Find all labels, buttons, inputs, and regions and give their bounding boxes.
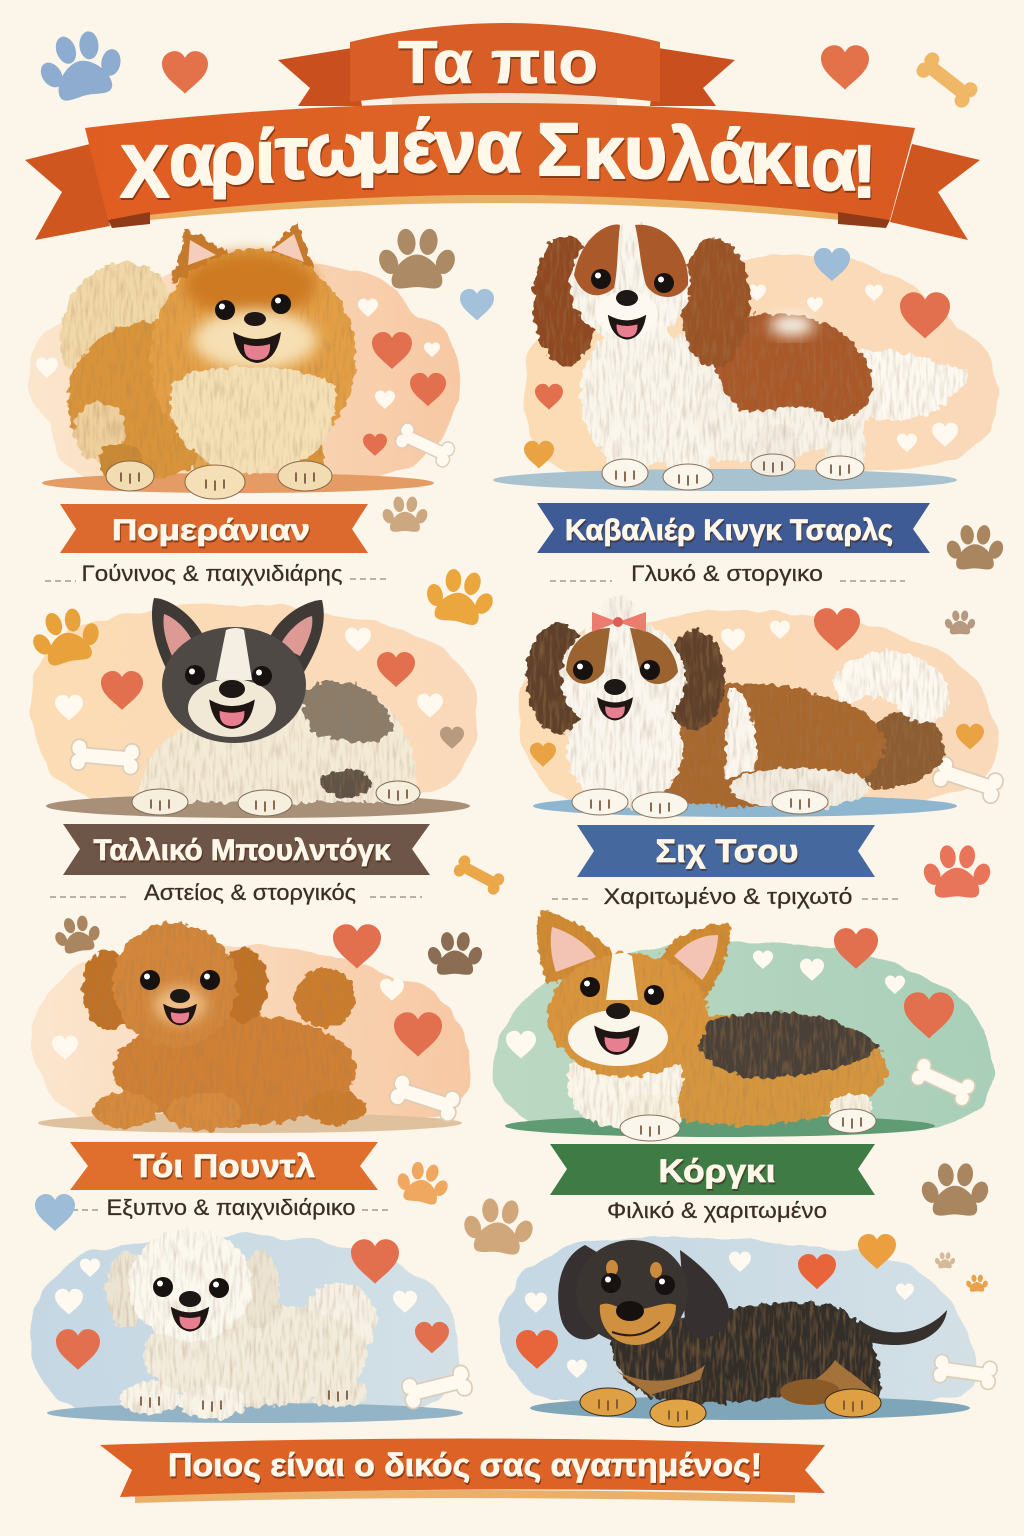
name: Καβαλιέρ Κινγκ Τσαρλς (565, 514, 893, 547)
icon: brown paw (376, 228, 458, 289)
ground (42, 473, 434, 493)
tagline: Εξυπνο & παιχνιδιάρικο (106, 1195, 356, 1220)
panel: Pomeranian (29, 222, 494, 586)
blob hearts (55, 1239, 474, 1410)
panel: Toy Poodle (32, 923, 470, 1220)
name: Τόι Πουντλ (133, 1148, 315, 1184)
yellow underside (150, 195, 840, 220)
ribbon shape (100, 1438, 825, 1497)
yellow underside (135, 1490, 795, 1503)
icon: blue heart (814, 248, 850, 281)
ground (505, 1115, 935, 1137)
panel: Cavalier (493, 223, 998, 586)
blob hearts (516, 1234, 998, 1390)
top ribbon (350, 23, 660, 102)
panel: Shih Tzu (520, 596, 1005, 909)
icon: small tan paw (934, 1252, 956, 1268)
footer ribbon (100, 1438, 825, 1503)
heading: Τα πιο: Τα πιο (398, 29, 598, 96)
blob hearts (506, 928, 977, 1108)
blob hearts (524, 284, 958, 468)
ribbon (537, 503, 930, 553)
corner icons (31, 24, 980, 110)
icon: orange paw (420, 563, 500, 629)
dog: Toy Poodle (82, 923, 365, 1131)
tagline: Γούνινος & παιχνιδιάρης (82, 561, 342, 586)
ground (530, 1396, 970, 1420)
ribbon folds (108, 212, 890, 228)
bow (592, 612, 646, 632)
icon: small tan paw (943, 610, 977, 634)
blob (32, 604, 478, 798)
icon: coral paw (921, 844, 993, 898)
icon: brown paw (919, 1162, 991, 1216)
icon: orange bone (452, 853, 506, 897)
ground (533, 795, 957, 817)
tagline: Χαριτωμένο & τριχωτό (604, 884, 852, 909)
dog: Dachshund (558, 1240, 947, 1427)
dog: Shih Tzu (526, 596, 950, 818)
title banner (25, 23, 980, 240)
tagline: Φιλικό & χαριτωμένο (607, 1198, 827, 1223)
panel: Maltese (30, 1229, 474, 1423)
icon: tan paw (459, 1195, 538, 1256)
ground (46, 794, 470, 818)
blob (520, 610, 1000, 800)
icon: blue heart (35, 1194, 75, 1231)
dog: French bulldog (132, 598, 420, 816)
icon: heart (821, 45, 869, 90)
dog: Pomeranian (60, 222, 356, 499)
ground (47, 1403, 463, 1423)
ground (493, 469, 957, 491)
blob (500, 1238, 977, 1400)
top ribbon tails (278, 48, 735, 106)
ribbon (60, 504, 368, 553)
icon: blue paw (31, 24, 130, 106)
blob hearts (36, 298, 457, 469)
dog: Corgi (537, 910, 888, 1141)
name: Σιχ Τσου (656, 833, 798, 869)
tagline: Αστείος & στοργικός (144, 880, 356, 905)
icon: small orange paw (965, 1274, 989, 1292)
ground (38, 1113, 462, 1133)
tagline: Γλυκό & στοργικο (631, 561, 823, 586)
icon: blue heart (460, 289, 494, 320)
name: Κόργκι (658, 1153, 776, 1189)
panel: French bulldog (25, 598, 478, 905)
dog: Maltese (106, 1229, 377, 1419)
blob (524, 256, 998, 472)
footer text: Ποιος είναι ο δικός σας αγαπημένος! (168, 1447, 762, 1483)
ribbon (577, 825, 875, 877)
blob hearts (530, 608, 1005, 805)
ribbon (63, 824, 430, 875)
name: Πομεράνιαν (112, 514, 310, 547)
icon: bone (914, 50, 980, 110)
blob (29, 261, 459, 478)
icon: heart (162, 51, 208, 94)
icon: brown paw (425, 931, 485, 975)
name: Ταλλικό Μπουλντόγκ (94, 834, 391, 867)
ribbon (550, 1144, 875, 1195)
blob (32, 945, 470, 1122)
white strip (392, 92, 617, 110)
main ribbon (85, 103, 915, 220)
blob hearts (52, 924, 462, 1123)
blob hearts (25, 602, 464, 775)
dog: Cavalier (533, 223, 970, 490)
heading: Χαρίτωμένα Σκυλάκια!: Χαρίτωμένα Σκυλάκια! (120, 105, 877, 213)
panel: Corgi (494, 910, 995, 1223)
icon: tan paw (381, 496, 429, 532)
icon: tan paw (50, 912, 104, 956)
main ribbon tails (25, 144, 980, 240)
icon: peach paw (392, 1158, 453, 1207)
ribbon (70, 1142, 378, 1190)
blob (30, 1235, 458, 1415)
panel: Dachshund (500, 1234, 998, 1427)
icon: brown paw (944, 524, 1006, 569)
blob (494, 942, 995, 1130)
